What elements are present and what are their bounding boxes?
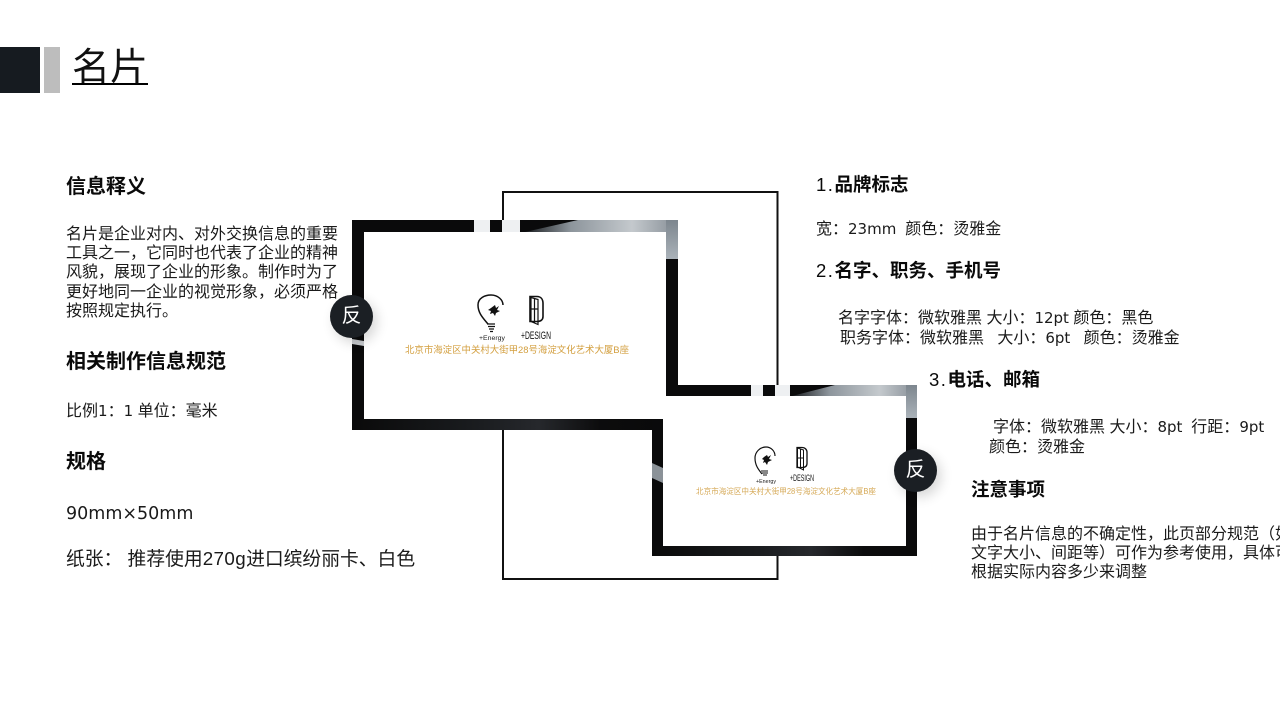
header marker: dark square (0, 47, 40, 93)
logo: door mark (530, 296, 543, 324)
text block: contact font spec: 字体：微软雅黑 大小：8pt 行距：9pt (993, 418, 1264, 436)
panel: right specification column (816, 174, 1280, 581)
heading: production specification: 相关制作信息规范 (66, 351, 226, 373)
logo label: design: +DESIGN (521, 330, 551, 342)
badge: reverse side, card one (330, 295, 373, 338)
card address: 北京市海淀区中关村大街甲28号海淀文化艺术大厦B座 (405, 344, 629, 356)
text block: definition: 更好地同一企业的视觉形象，必须严格 (66, 284, 338, 301)
heading: notes: 注意事项 (971, 479, 1045, 500)
panel: left information column (66, 176, 415, 569)
text block: definition: 风貌，展现了企业的形象。制作时为了 (66, 264, 338, 281)
heading: name and title: 2.名字、职务、手机号 (816, 260, 1001, 281)
text block: title spec: 职务字体：微软雅黑 大小：6pt 颜色：烫雅金 (840, 329, 1180, 347)
heading: phone and email: 3.电话、邮箱 (929, 369, 1040, 390)
heading: format: 规格 (66, 451, 106, 473)
text block: contact colour spec: 颜色：烫雅金 (989, 439, 1085, 456)
logo label: energy: +Energy (479, 336, 505, 342)
text block: notes (971, 525, 1280, 581)
text block: definition: 工具之一，它同时也代表了企业的精神 (66, 245, 338, 262)
text block: dimensions: 90mm×50mm (66, 504, 193, 524)
text block: scale: 比例1：1 单位：毫米 (66, 402, 218, 420)
text block: definition (66, 225, 338, 320)
front card two (652, 385, 917, 556)
logo: door mark (797, 448, 807, 470)
text block: paper: 纸张： 推荐使用270g进口缤纷丽卡、白色 (66, 548, 415, 569)
title: 名片 (72, 47, 148, 89)
text block: logo spec: 宽：23mm 颜色：烫雅金 (816, 220, 1001, 238)
heading: brand logo: 1.品牌标志 (816, 174, 908, 195)
logo: energy bulb (755, 447, 775, 475)
badge: reverse side, card two (894, 449, 937, 492)
text block: name spec: 名字字体：微软雅黑 大小：12pt 颜色：黑色 (838, 309, 1153, 327)
text block: notes: 根据实际内容多少来调整 (971, 564, 1147, 581)
outlined back card (503, 192, 778, 579)
card address: 北京市海淀区中关村大街甲28号海淀文化艺术大厦B座 (696, 486, 876, 496)
logo: energy bulb (478, 295, 503, 332)
text block: definition: 按照规定执行。 (66, 303, 178, 320)
text block: definition: 名片是企业对内、对外交换信息的重要 (66, 226, 338, 243)
front card one (352, 220, 678, 430)
header marker: grey bar (44, 47, 60, 93)
logo label: design: +DESIGN (790, 473, 814, 483)
logo label: energy: +Energy (756, 479, 777, 485)
heading: information definition: 信息释义 (66, 176, 146, 198)
badge: reverse side, card one: 反 (342, 305, 362, 327)
badge: reverse side, card two: 反 (906, 459, 926, 481)
